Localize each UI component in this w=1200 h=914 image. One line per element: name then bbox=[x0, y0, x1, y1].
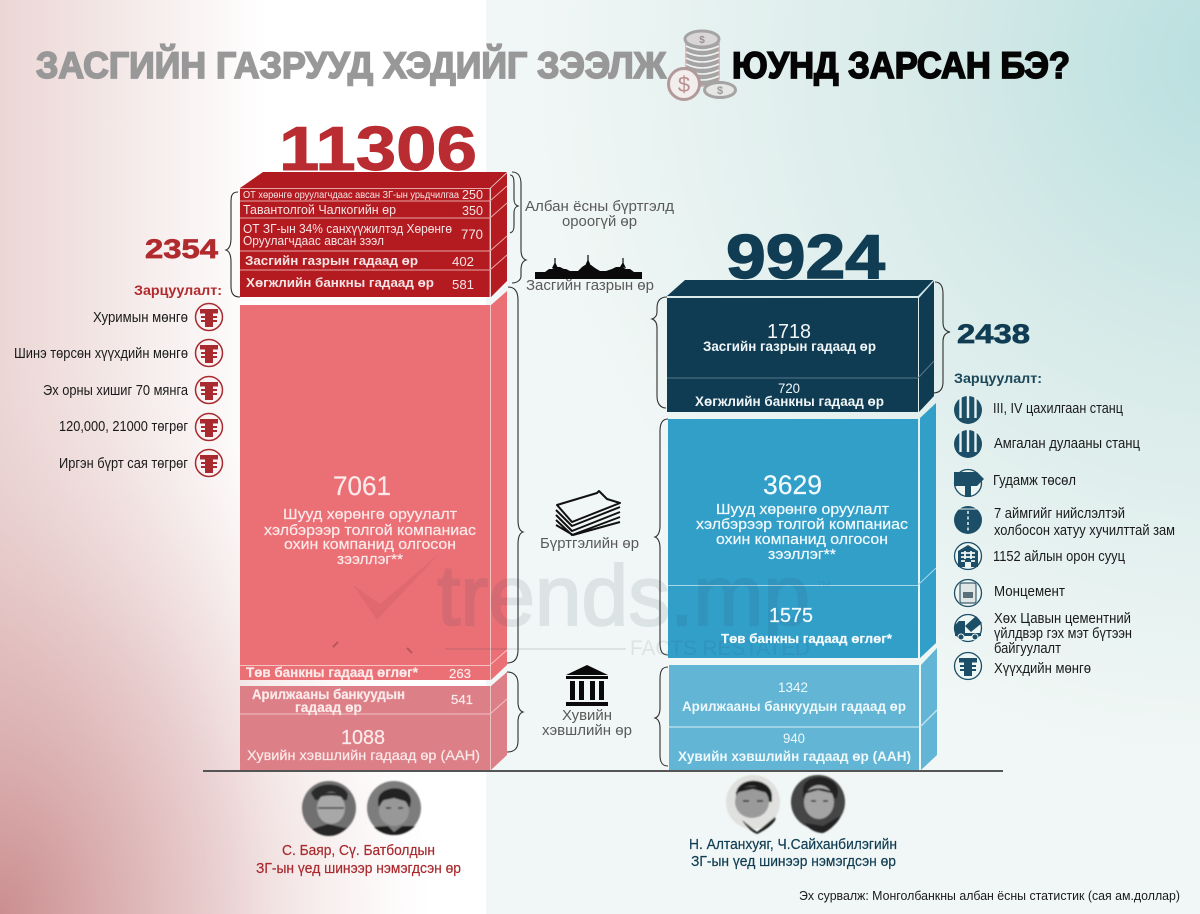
right stacked block: private debt bbox=[669, 648, 937, 770]
blue block labels: 1575 bbox=[769, 605, 813, 627]
blue block labels: 3629 bbox=[763, 470, 822, 500]
dark block labels: Засгийн газрын гадаад өр bbox=[703, 339, 876, 354]
item: heat plant bbox=[954, 430, 1140, 458]
item: bridge project bbox=[954, 470, 1076, 497]
heading: left spending: Зарцуулалт: bbox=[134, 283, 222, 298]
dark block labels bbox=[695, 321, 884, 409]
left stacked block: red unregistered debt bbox=[240, 172, 507, 297]
blue block labels bbox=[696, 470, 908, 646]
item: newborn money bbox=[14, 340, 222, 366]
icon: coins: $ bbox=[717, 85, 723, 97]
item: cement factory: байгуулалт bbox=[994, 640, 1061, 657]
subtotal: 2438: 2438 bbox=[957, 319, 1030, 349]
row: tavan tolgoi: Тавантолгой Чалкогийн өр bbox=[243, 203, 396, 217]
row: advance: 250 bbox=[462, 187, 483, 202]
item: newborn money: Шинэ төрсөн хүүхдийн мөнгө bbox=[14, 345, 188, 362]
pink block labels: 1088 bbox=[341, 727, 385, 749]
item: cement factory: Хөх Цавын цементний bbox=[994, 610, 1131, 627]
total: 11306: 11306 bbox=[279, 115, 477, 184]
label: registered debt: Бүртгэлийн өр bbox=[540, 535, 639, 552]
blue block labels: охин компанид олгосон bbox=[716, 532, 888, 548]
item: paved road bbox=[954, 505, 1175, 539]
pink block labels: Арилжааны банкуудын bbox=[252, 686, 405, 702]
row: government external: Засгийн газрын гадаад өр bbox=[245, 253, 418, 268]
row: development bank: Хөгжлийн банкны гадаад өр bbox=[246, 275, 434, 290]
item: power plant: III, IV цахилгаан станц bbox=[993, 400, 1123, 417]
portrait: N. Altankhuyag bbox=[726, 775, 780, 834]
pink block labels bbox=[246, 471, 480, 763]
item: wedding money: Хуримын мөнгө bbox=[93, 309, 188, 326]
pink block labels: охин компанид олгосон bbox=[284, 537, 456, 553]
blue block labels: Шууд хөрөнгө оруулалт bbox=[716, 502, 889, 518]
caption: left governments: ЗГ-ын үед шинээр нэмэгдсэн өр bbox=[256, 861, 461, 877]
light blue block labels bbox=[678, 680, 911, 764]
label: private sector debt: Хувийн bbox=[562, 707, 612, 724]
pink block labels: Шууд хөрөнгө оруулалт bbox=[283, 507, 457, 523]
row: OT loan: 770 bbox=[461, 227, 483, 242]
item: apartments bbox=[954, 542, 1125, 570]
item: million per citizen bbox=[59, 450, 222, 476]
pink block labels: зээллэг** bbox=[337, 552, 403, 568]
caption: right governments bbox=[689, 837, 897, 870]
title: ЗАСГИЙН ГАЗРУУД ХЭДИЙГ ЗЭЭЛЖ bbox=[36, 44, 667, 86]
icon: coins: $ bbox=[699, 35, 705, 46]
item: power plant bbox=[954, 396, 1123, 424]
braces bbox=[226, 172, 950, 766]
row: government external bbox=[245, 253, 474, 269]
item: moncement: Монцемент bbox=[994, 583, 1065, 600]
source note: Эх сурвалж: Монголбанкны албан ёсны статистик (сая ам.доллар) bbox=[799, 889, 1180, 903]
row: OT loan: Оруулагчдаас авсан зээл bbox=[243, 234, 384, 248]
right stacked block: dark unregistered debt bbox=[667, 280, 934, 412]
row: OT loan: ОТ ЗГ-ын 34% санхүүжилтэд Хөрөнгө bbox=[243, 222, 452, 236]
item: cement factory: үйлдвэр гэх мэт бүтээн bbox=[994, 625, 1132, 642]
icon: government palace bbox=[535, 255, 642, 279]
icon: stack of paper bbox=[556, 491, 620, 535]
icon: coins bbox=[668, 31, 736, 100]
pink block labels: 7061 bbox=[333, 471, 391, 501]
item: million per citizen: Иргэн бүрт сая төгрөг bbox=[59, 455, 188, 472]
portrait: S. Bayar bbox=[302, 781, 356, 836]
title: ЮУНД ЗАРСАН БЭ? bbox=[732, 45, 1070, 86]
item: 120000 and 21000: 120,000, 21000 төгрөг bbox=[59, 418, 188, 435]
row: development bank: 581 bbox=[452, 277, 474, 292]
item: paved road: 7 аймгийг нийслэлтэй bbox=[994, 505, 1125, 522]
item: 120000 and 21000 bbox=[59, 414, 222, 440]
icon: coins: $ bbox=[678, 72, 690, 97]
label: private sector debt: хэвшлийн өр bbox=[542, 722, 632, 739]
label: not in official register: ороогүй өр bbox=[562, 213, 637, 230]
row: OT loan bbox=[243, 222, 483, 248]
item: cement factory bbox=[954, 610, 1132, 657]
dark block labels: 1718 bbox=[767, 321, 811, 343]
total: 9924: 9924 bbox=[726, 223, 886, 292]
item: wedding money bbox=[93, 304, 222, 330]
row: tavan tolgoi bbox=[243, 203, 483, 218]
left stacked block: private debt bbox=[240, 672, 507, 770]
blue block labels: Төв банкны гадаад өглөг* bbox=[721, 631, 893, 646]
blue block labels: хэлбэрээр толгой компаниас bbox=[696, 517, 908, 533]
pink block labels: 541 bbox=[451, 692, 473, 707]
item: bridge project: Гудамж төсөл bbox=[993, 472, 1076, 489]
caption: right governments: ЗГ-ын үед шинээр нэмэгдсэн өр bbox=[691, 854, 896, 870]
caption: left governments: С. Баяр, Сү. Батболдын bbox=[282, 843, 435, 859]
baseline axis bbox=[203, 770, 1003, 772]
label: not in official register bbox=[525, 198, 674, 230]
left spending list bbox=[14, 304, 222, 476]
dark block labels: Хөгжлийн банкны гадаад өр bbox=[695, 394, 884, 409]
row: tavan tolgoi: 350 bbox=[462, 203, 483, 218]
item: children money: Хүүхдийн мөнгө bbox=[994, 660, 1091, 677]
row: advance: ОТ хөрөнгө оруулагчдаас авсан ЗГ-ын урьдчилгаа bbox=[243, 189, 459, 201]
item: moncement bbox=[954, 580, 1065, 606]
right stacked block: blue registered debt bbox=[668, 403, 936, 658]
caption: right governments: Н. Алтанхуяг, Ч.Сайханбилэгийн bbox=[689, 837, 897, 853]
watermark bbox=[333, 549, 830, 660]
item: apartments: 1152 айлын орон сууц bbox=[993, 548, 1125, 565]
watermark: trends.mp bbox=[437, 549, 810, 644]
subtotal: 2354: 2354 bbox=[145, 234, 218, 264]
portrait: Ch. Saikhanbileg bbox=[791, 775, 845, 833]
pink block labels: Хувийн хэвшлийн гадаад өр (ААН) bbox=[247, 747, 480, 763]
light blue block labels: 1342 bbox=[778, 680, 808, 695]
pink block labels: Төв банкны гадаад өглөг* bbox=[246, 665, 419, 680]
title bbox=[36, 44, 1070, 86]
heading: right spending: Зарцуулалт: bbox=[954, 371, 1042, 386]
dark block labels: 720 bbox=[778, 381, 800, 396]
caption: left governments bbox=[256, 843, 461, 877]
item: heat plant: Амгалан дулааны станц bbox=[994, 435, 1140, 452]
label: government debt: Засгийн газрын өр bbox=[526, 277, 654, 294]
portrait: Su. Batbold bbox=[367, 781, 421, 835]
watermark: FACTS RESTATED bbox=[630, 637, 810, 660]
row: government external: 402 bbox=[452, 254, 474, 269]
item: paved road: холбосон хатуу хучилттай зам bbox=[994, 522, 1175, 539]
light blue block labels: Арилжааны банкуудын гадаад өр bbox=[682, 699, 906, 714]
blue block labels: зээллэг** bbox=[768, 547, 836, 563]
pink block labels: гадаад өр bbox=[295, 699, 362, 715]
label: private sector debt bbox=[542, 707, 632, 739]
left stacked block: pink registered debt bbox=[240, 291, 507, 680]
pink block labels: 263 bbox=[449, 666, 471, 681]
label: not in official register: Албан ёсны бүртгэлд bbox=[525, 198, 674, 215]
item: motherland award bbox=[43, 376, 222, 404]
light blue block labels: Хувийн хэвшлийн гадаад өр (ААН) bbox=[678, 748, 911, 764]
pink block labels: хэлбэрээр толгой компаниас bbox=[264, 523, 476, 539]
light blue block labels: 940 bbox=[783, 731, 805, 746]
watermark: TM bbox=[817, 580, 830, 590]
item: motherland award: Эх орны хишиг 70 мянга bbox=[43, 382, 189, 399]
item: children money bbox=[954, 652, 1091, 680]
icon: bank bbox=[566, 665, 608, 706]
right spending list bbox=[954, 396, 1175, 680]
